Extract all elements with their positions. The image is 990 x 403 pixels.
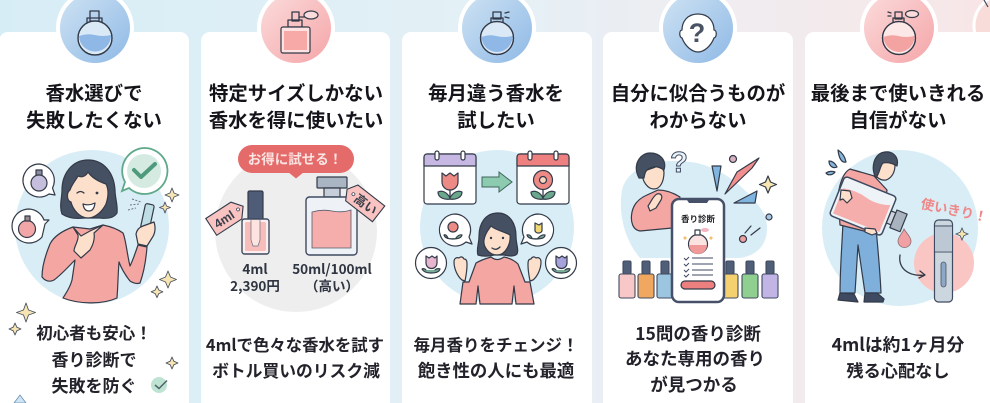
icon: round perfume bottle: [56, 0, 134, 67]
body text: [832, 331, 965, 382]
callout pill: お得に試せる！: [248, 148, 342, 168]
icon: head with question mark: ?: [689, 18, 705, 48]
icon: corner triangle: [14, 395, 26, 403]
blue blob: [621, 161, 767, 258]
callout pill: [238, 145, 354, 178]
next circle edge at right: [974, 0, 990, 58]
heading: [26, 77, 162, 133]
man: [631, 153, 680, 231]
body text: 15問の香り診断: [635, 321, 761, 346]
woman hair: [61, 160, 117, 218]
body text: [414, 332, 578, 383]
body text: 4mlは約1ヶ月分: [832, 331, 965, 357]
body text: あなた専用の香り: [625, 346, 765, 371]
speech bubble: green check: [122, 148, 167, 194]
burst shapes: [712, 156, 776, 242]
heading: 香水を得に使いたい: [209, 104, 383, 133]
body text: 毎月香りをチェンジ！: [414, 332, 578, 356]
body text: 香り診断で: [52, 346, 136, 371]
heading: 試したい: [457, 104, 535, 133]
panel: card 5: [805, 0, 990, 403]
panel: card 1: [0, 0, 189, 403]
body text: [625, 321, 765, 397]
heading: 毎月違う香水を: [428, 77, 564, 106]
illustration: fragrance diagnosis: [619, 147, 778, 302]
illustration: woman holding atomizer: [9, 148, 179, 369]
calendar: flower: [517, 151, 569, 204]
icon: blue spray bottle: [458, 0, 536, 67]
body text: 失敗を防ぐ: [52, 372, 136, 397]
blue drops: [826, 150, 846, 175]
phone: 香り診断: [681, 213, 715, 225]
tag 4ml: 4ml: [212, 208, 237, 231]
tag 4ml: [206, 198, 249, 235]
body text: 飽き性の人にも最適: [418, 358, 574, 383]
man: [838, 152, 897, 302]
icon: head with question mark: [659, 0, 737, 67]
woman: [454, 213, 541, 304]
heading: [209, 77, 383, 133]
flower bubbles: [416, 214, 576, 278]
question mark: ?: [670, 147, 688, 179]
icon: small check: [151, 377, 167, 393]
heading: 自分に似合うものが: [611, 77, 785, 106]
atomizer: [934, 220, 952, 302]
body text: 初心者も安心！: [36, 320, 152, 344]
body text: が見つかる: [650, 372, 738, 397]
icon: pink round perfume: [860, 0, 938, 67]
large tilted bottle: [829, 176, 912, 242]
large bottle: [306, 177, 357, 255]
hands: [840, 190, 877, 235]
woman pointing hand: [73, 225, 103, 258]
pink drop: [898, 229, 911, 248]
size labels: [230, 258, 372, 295]
arrow: [482, 172, 512, 192]
heading: [811, 77, 985, 133]
size labels: （高い）: [305, 275, 359, 295]
atomizer in hand: [139, 203, 154, 238]
calendar: tulip: [424, 151, 476, 204]
heading: [611, 77, 785, 133]
panel: card 3: [402, 0, 592, 403]
woman face: [67, 172, 108, 218]
heading: わからない: [650, 104, 746, 133]
curved arrow: [900, 255, 925, 278]
small 4ml bottle: [242, 191, 269, 254]
illustration: size comparison: [206, 145, 385, 312]
panel: card 4: [603, 0, 793, 403]
heading: 香水選びで: [46, 77, 142, 106]
panel: card 2: [201, 0, 390, 403]
sparkle: [956, 228, 968, 240]
sparkles: [9, 188, 179, 369]
heading: 最後まで使いきれる: [811, 77, 985, 106]
body text: [36, 320, 152, 397]
illustration: monthly change: [416, 150, 576, 304]
heading: 自信がない: [850, 104, 946, 133]
row of bottles: [619, 261, 778, 298]
size labels: 2,390円: [230, 275, 280, 295]
body text: [206, 332, 384, 382]
heading: 特定サイズしかない: [209, 77, 383, 106]
speech bubble: pink bottle: [12, 209, 49, 243]
illustration: using it up: [822, 150, 989, 306]
label: used up: 使いきり！: [919, 192, 989, 226]
phone: [672, 199, 724, 302]
heading: [428, 77, 564, 133]
size labels: 50ml/100ml: [292, 258, 372, 278]
woman sweater: [42, 225, 147, 303]
speech bubble: purple bottle: [23, 164, 55, 197]
icon: pink perfume with bulb: [257, 0, 335, 67]
body text: 4mlで色々な香水を試す: [206, 332, 384, 356]
body text: ボトル買いのリスク減: [212, 358, 380, 382]
size labels: 4ml: [242, 258, 268, 278]
tag expensive: 高い: [351, 188, 382, 219]
tag expensive: [341, 181, 385, 222]
body text: 残る心配なし: [846, 357, 950, 382]
heading: 失敗したくない: [26, 104, 162, 133]
